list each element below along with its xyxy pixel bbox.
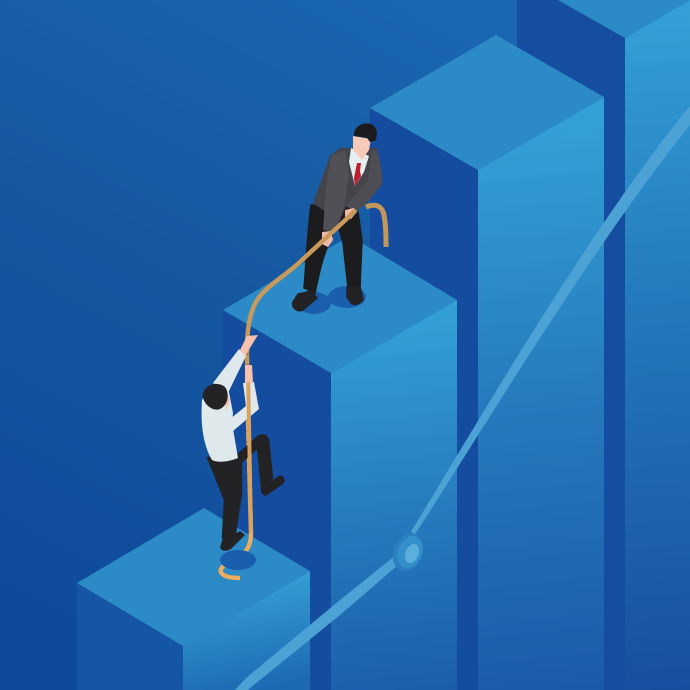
bar: middle — [223, 236, 457, 690]
rope over body — [248, 370, 251, 533]
tie — [354, 163, 361, 186]
shoes — [293, 291, 317, 311]
man standing: pulling rope — [293, 123, 386, 314]
growth line — [235, 96, 690, 690]
shirt arm bent — [230, 382, 259, 431]
jacket arm — [323, 150, 349, 232]
shirt arm raised — [213, 349, 246, 393]
head — [353, 136, 371, 160]
hands — [322, 208, 356, 247]
hair — [203, 384, 228, 410]
bar: small — [77, 508, 310, 690]
trousers — [304, 205, 362, 293]
face — [224, 388, 230, 410]
man climbing — [202, 335, 284, 570]
shirt torso — [202, 383, 238, 462]
shirt — [349, 148, 369, 186]
rope tail — [366, 205, 386, 247]
shadow — [220, 550, 256, 570]
hair — [354, 123, 377, 142]
bar: tallest — [517, 0, 690, 690]
shadows — [297, 292, 331, 314]
hands — [240, 335, 258, 383]
line node — [387, 528, 429, 576]
bar: large — [370, 35, 604, 690]
jacket right arm — [346, 150, 382, 212]
rope — [221, 210, 356, 578]
shoes — [221, 476, 284, 550]
trousers — [208, 436, 272, 538]
jacket — [313, 148, 382, 232]
